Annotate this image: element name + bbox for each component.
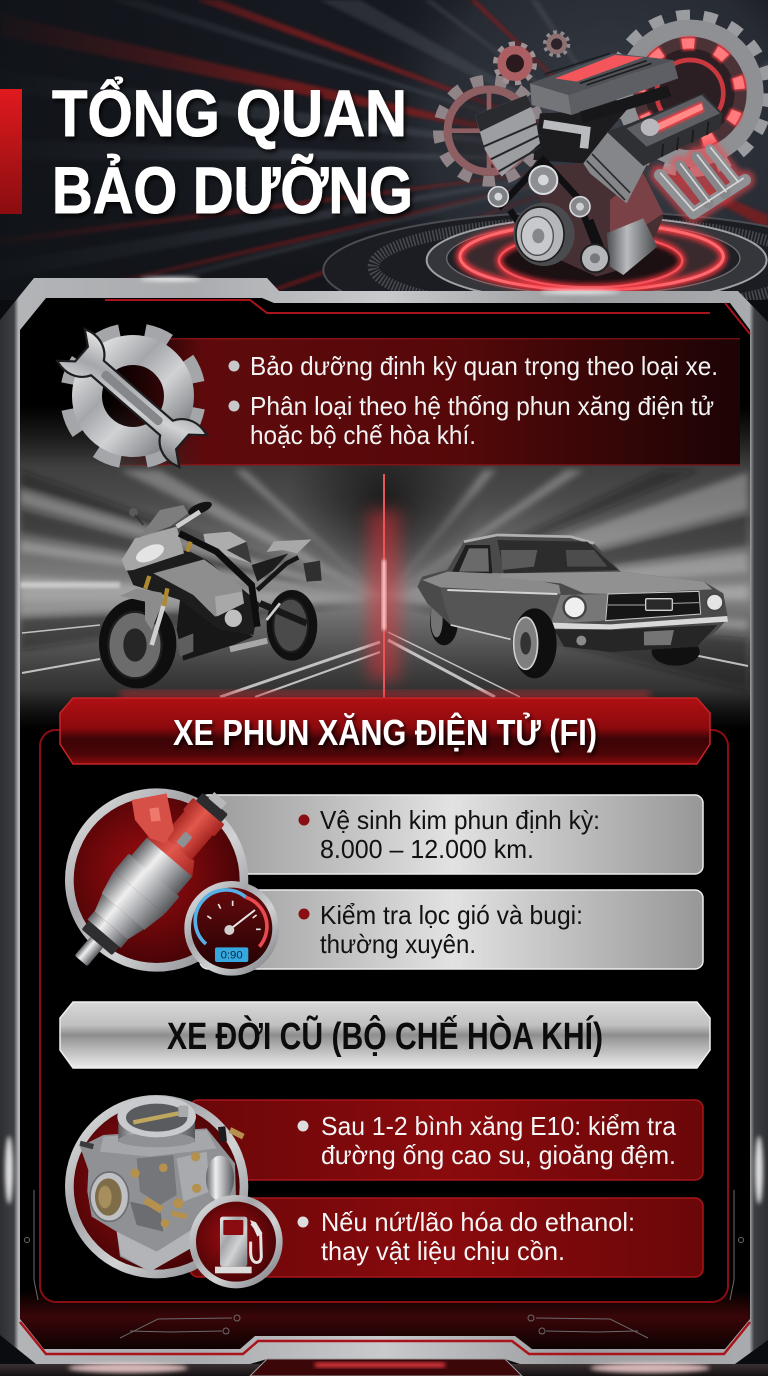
info text: Phân loại theo hệ thống phun xăng điện tử [250,391,714,421]
FI row 2 [200,890,703,969]
intake manifold [530,53,678,117]
title accent bar [0,89,22,214]
frame red accents [20,300,750,1354]
info strip [56,323,740,469]
header background with speed streaks [0,0,768,300]
icon: fuel pump [193,1198,279,1285]
red divider glow [368,474,400,698]
carburetor row 1: đường ống cao su, gioăng đệm. [321,1140,676,1170]
frame glints [5,277,763,1204]
icon: speedometer gauge [188,884,276,972]
carburetor row 1 [190,1100,703,1180]
FI row 1: Vệ sinh kim phun định kỳ: [320,805,600,835]
metal frame [0,278,768,1364]
carburetor row 1: Sau 1-2 bình xăng E10: kiểm tra [321,1111,677,1141]
lower engine block [530,88,673,277]
info text [228,351,718,450]
icon: fuel injector [56,776,246,982]
platform [322,212,768,300]
FI heading: XE PHUN XĂNG ĐIỆN TỬ (FI) [173,711,597,753]
left gear [438,80,540,181]
main frame interior [20,298,750,1349]
carburetor row 2 [190,1198,703,1277]
bottom center plate [0,1359,768,1376]
icon: speedometer gauge: 0:90 [221,950,243,962]
FI row 2: Kiểm tra lọc gió và bugi: [320,900,583,930]
FI row 1 [200,795,703,874]
carburetor row 2: Nếu nứt/lão hóa do ethanol: [321,1207,635,1237]
carburetor row 2: thay vật liệu chịu cồn. [321,1236,565,1266]
right cylinder head [583,93,723,203]
carburetor heading: XE ĐỜI CŨ (BỘ CHẾ HÒA KHÍ) [167,1013,603,1058]
info text: hoặc bộ chế hòa khí. [250,420,476,450]
icon: classic car [417,535,728,678]
FI row 1: 8.000 – 12.000 km. [320,834,534,864]
circuit decoration [24,1190,744,1338]
exhaust headers [660,148,745,213]
icon: motorcycle [99,499,322,688]
left cylinder bank [475,95,542,177]
title: TỔNG QUAN [52,76,407,150]
icon: carburetor [69,1096,244,1274]
lower panel surround [20,1290,750,1350]
carburetor heading [60,1002,710,1068]
info text: Bảo dưỡng định kỳ quan trọng theo loại xe. [250,351,718,381]
vehicle comparison scene [20,405,750,730]
panel: lower content [40,692,728,1302]
small gears [496,32,568,83]
FI heading [60,692,710,764]
engine illustration with gears [323,16,768,328]
title [52,76,413,227]
FI row 2: thường xuyên. [320,929,476,959]
big gear [613,16,767,171]
title: BẢO DƯỠNG [52,153,413,227]
icon: wrench and gear [56,323,208,469]
pulleys and belts [488,160,657,275]
